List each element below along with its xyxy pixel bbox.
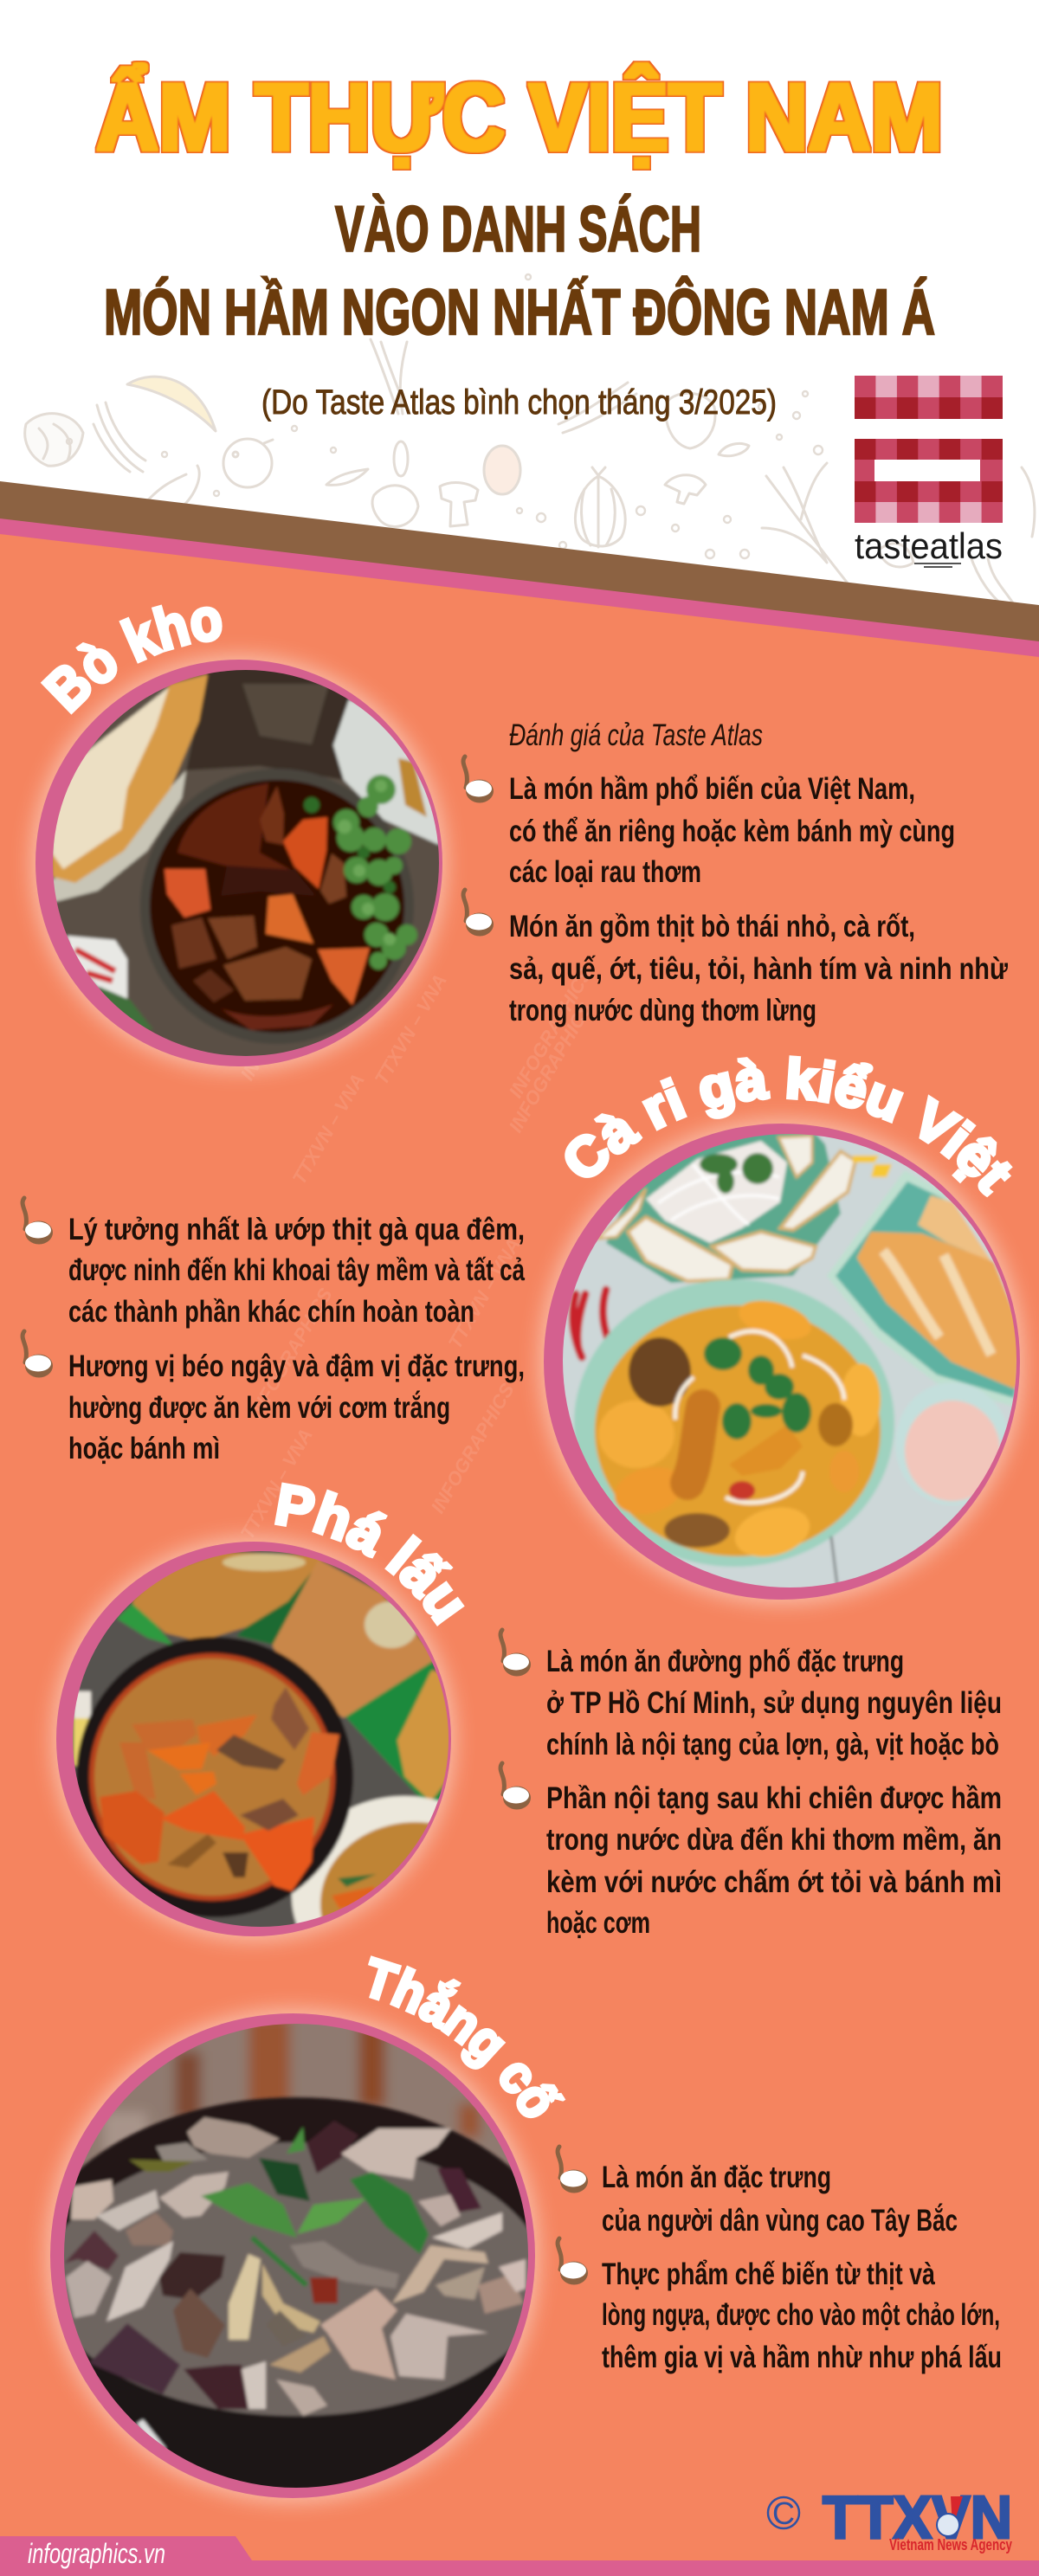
subtitle: VÀO DANH SÁCH bbox=[335, 193, 701, 265]
watermarks: TTXVN – VNA bbox=[444, 1234, 525, 1352]
watermarks: INFOGRAPHICS bbox=[427, 1380, 519, 1517]
subtitle bbox=[104, 193, 935, 348]
logo: Taste Atlas: tasteatlas bbox=[855, 525, 1003, 566]
description: Cà ri point 2: hoặc bánh mì bbox=[68, 1432, 220, 1465]
description: Cà ri point 2: Hương vị béo ngậy và đậm vị đặc trưng, bbox=[68, 1349, 525, 1383]
logo: Taste Atlas bbox=[855, 376, 1003, 567]
footer bar bbox=[0, 2536, 1039, 2576]
icon: ladle bullet bbox=[500, 1763, 531, 1809]
doodle pattern of food sketches bbox=[25, 274, 1035, 610]
icon: ladle bullet bbox=[463, 890, 494, 937]
description: Bò kho point 1 bbox=[509, 772, 955, 889]
photo: chicken curry bbox=[539, 1119, 1024, 1604]
watermarks: TTXVN – VNA bbox=[371, 970, 451, 1089]
watermarks: INFOGRAPHICS bbox=[505, 999, 597, 1136]
photo: phá lấu bowl bbox=[41, 1526, 467, 1952]
icon: ladle bullet bbox=[558, 2238, 588, 2285]
icon: ladle bullet bbox=[23, 1331, 53, 1378]
description: Bò kho point 2 bbox=[509, 910, 1009, 1027]
description: Cà ri point 2 bbox=[68, 1349, 525, 1465]
description: Thắng cố point 2 bbox=[602, 2257, 1002, 2374]
photo: bò kho in pot bbox=[31, 655, 450, 1073]
description: Phá lấu point 1: Là món ăn đường phố đặc trưng bbox=[546, 1645, 904, 1678]
watermarks: TTXVN – VNA bbox=[288, 1070, 369, 1188]
logo: TTXVN: TTXVN bbox=[823, 2483, 1012, 2551]
description: Cà ri point 1: Lý tưởng nhất là ướp thịt gà qua đêm, bbox=[68, 1213, 525, 1246]
footer source: infographics.vn bbox=[28, 2538, 165, 2569]
dish title: Thắng cố: Thắng cố bbox=[368, 1955, 566, 2119]
panel: Bò kho bbox=[20, 604, 1009, 1082]
dish title: Phá lấu: Phá lấu bbox=[274, 1482, 465, 1626]
icon: ladle bullet bbox=[558, 2147, 588, 2193]
icon: ladle bullet bbox=[500, 1630, 531, 1676]
description: Phá lấu point 2 bbox=[546, 1781, 1002, 1940]
title: Ẩm thực Việt Nam: ẨM THỰC VIỆT NAM bbox=[96, 63, 943, 171]
description: Cà ri point 1 bbox=[68, 1213, 525, 1329]
description: Cà ri point 1: được ninh đến khi khoai tây mềm và tất cả bbox=[68, 1253, 525, 1287]
description: Cà ri point 1: các thành phần khác chín hoàn toàn bbox=[68, 1295, 474, 1329]
description: Bò kho point 1: các loại rau thơm bbox=[509, 855, 701, 889]
photo: thắng cố pan bbox=[21, 2008, 571, 2502]
description: Bò kho point 2: Món ăn gồm thịt bò thái nhỏ, cà rốt, bbox=[509, 910, 915, 943]
description: Bò kho point 1: Là món hầm phổ biến của Việt Nam, bbox=[509, 772, 915, 806]
watermarks: INFOGRAPHICS bbox=[505, 964, 597, 1101]
watermarks: INFOGRAPHICS bbox=[245, 1285, 337, 1421]
description: Thắng cố point 1: Là món ăn đặc trưng bbox=[602, 2161, 831, 2194]
icon: ladle bullet bbox=[23, 1198, 53, 1245]
watermarks: INFOGRAPHICS bbox=[236, 947, 328, 1084]
panel: Phá lấu bbox=[41, 1482, 1002, 1952]
description: Bò kho point 2: trong nước dùng thơm lừng bbox=[509, 994, 816, 1027]
rating label: Đánh giá của Taste Atlas bbox=[509, 718, 763, 752]
logo: TTXVN: C bbox=[772, 2496, 795, 2531]
dish title: Bò kho: Bò kho bbox=[40, 604, 223, 715]
watermarks bbox=[236, 947, 597, 1542]
description: Cà ri point 2: hường được ăn kèm với cơm trắng bbox=[68, 1390, 450, 1425]
panel: Cà ri gà kiểu Việt bbox=[21, 1055, 1036, 1635]
dish title: Cà ri gà kiểu Việt: Cà ri gà kiểu Việt bbox=[565, 1055, 1013, 1198]
description: Thắng cố point 1 bbox=[602, 2161, 958, 2238]
icon: ladle bullet bbox=[463, 757, 494, 803]
description: Phá lấu point 2: hoặc cơm bbox=[546, 1906, 650, 1940]
panel: Thắng cố bbox=[35, 1955, 1002, 2533]
source note: (Do Taste Atlas bình chọn tháng 3/2025) bbox=[261, 383, 777, 422]
watermarks: TTXVN – VNA bbox=[236, 1425, 317, 1542]
description: Phá lấu point 1 bbox=[546, 1645, 1002, 1761]
description: Thắng cố point 2: Thực phẩm chế biến từ thịt và bbox=[602, 2257, 935, 2291]
